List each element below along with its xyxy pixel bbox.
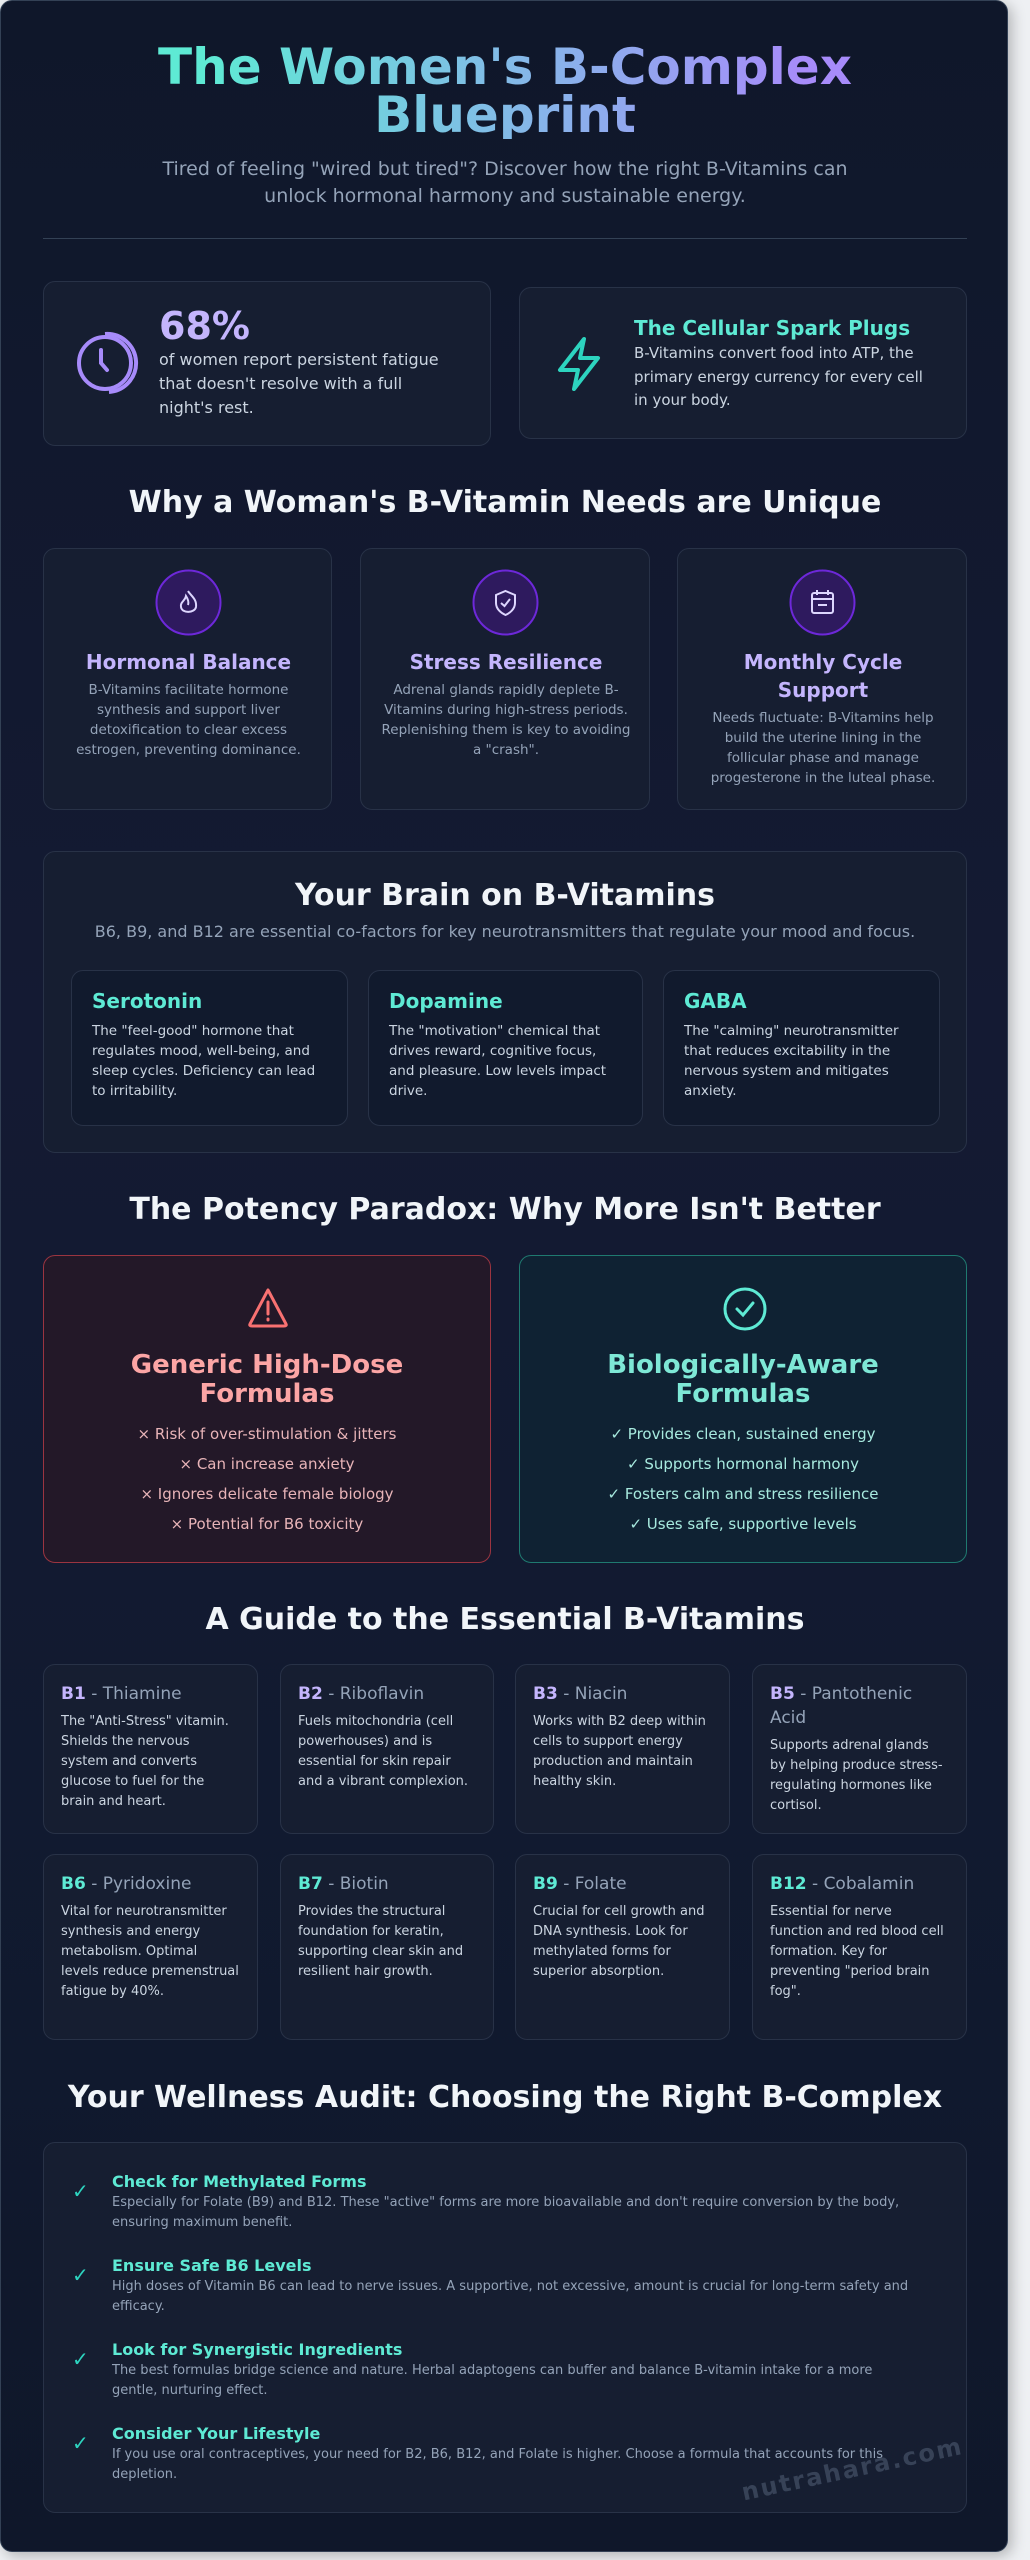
- card: dopamine: The "motivation" chemical that drives reward, cognitive focus, and pleasure. Low levels impact drive.: [389, 1023, 606, 1099]
- item 3: [72, 2340, 872, 2398]
- icon: flame: [156, 570, 222, 636]
- vitamin card B6: [43, 1854, 258, 2040]
- stat text: of women report persistent fatigue that doesn't resolve with a full night's rest.: [159, 350, 439, 417]
- title: [1, 43, 1009, 139]
- text: [711, 650, 935, 786]
- heading: wellness audit: Your Wellness Audit: Choosing the Right B-Complex: [68, 2080, 942, 2115]
- panel: biologically-aware: [519, 1255, 967, 1563]
- panel: generic formulas: [43, 1255, 491, 1563]
- card: serotonin: The "feel-good" hormone that regulates mood, well-being, and sleep cycles. Deficiency can lead to irritability.: [92, 1023, 315, 1099]
- vitamin card B3: Works with B2 deep within cells to support energy production and maintain healthy skin.: [533, 1714, 706, 1789]
- vitamin card B12: Essential for nerve function and red blood cell formation. Key for preventing "period brain fog".: [770, 1904, 944, 1999]
- text: The Cellular Spark Plugs: [634, 316, 910, 340]
- text: Formulas: [200, 1379, 334, 1409]
- text: Support: [778, 678, 868, 702]
- vitamin card B3: B3 - Niacin: [533, 1684, 627, 1704]
- item 4: ✓: [72, 2431, 89, 2455]
- item 3: The best formulas bridge science and nature. Herbal adaptogens can buffer and balance B-vitamin intake for a more gentle, nurturing effect.: [112, 2363, 872, 2398]
- icon: shield: [472, 570, 538, 636]
- panel: monthly cycle: [677, 548, 967, 810]
- item 2: Ensure Safe B6 Levels: [112, 2256, 311, 2275]
- vitamin card B1: [43, 1664, 258, 1834]
- item 1: Check for Methylated Forms: [112, 2172, 366, 2191]
- card: serotonin: Serotonin: [92, 989, 202, 1013]
- item 1: ✓: [72, 2179, 89, 2203]
- text: × Potential for B6 toxicity: [171, 1515, 363, 1533]
- vitamin card B2: [280, 1664, 494, 1834]
- text: × Can increase anxiety: [180, 1455, 354, 1473]
- text: Formulas: [676, 1379, 810, 1409]
- vitamin card B12: B12 - Cobalamin: [770, 1874, 914, 1894]
- card: dopamine: Dopamine: [389, 989, 503, 1013]
- vitamin card B9: Crucial for cell growth and DNA synthesis. Look for methylated forms for superior absorption.: [533, 1904, 704, 1979]
- vitamin card B1: B1 - Thiamine: [61, 1684, 182, 1704]
- stat text: 68%: [159, 304, 250, 348]
- text: Monthly Cycle: [744, 650, 902, 674]
- vitamin card B7: Provides the structural foundation for keratin, supporting clear skin and resilient hair growth.: [298, 1904, 463, 1979]
- item 3: ✓: [72, 2347, 89, 2371]
- text: × Ignores delicate female biology: [140, 1485, 394, 1503]
- vitamin card B5: [752, 1664, 967, 1834]
- stat text: [159, 304, 439, 417]
- text: ✓ Uses safe, supportive levels: [629, 1515, 857, 1533]
- card: dopamine: [368, 970, 643, 1126]
- text: × Risk of over-stimulation & jitters: [138, 1425, 396, 1443]
- icon: warning: [248, 1288, 288, 1328]
- item 4: If you use oral contraceptives, your need for B2, B6, B12, and Folate is higher. Choose a formula that accounts for this depletion.: [112, 2447, 883, 2482]
- vitamin card B5: B5 - Pantothenic Acid: [770, 1684, 912, 1728]
- text: ✓ Provides clean, sustained energy: [610, 1425, 876, 1443]
- item 4: [72, 2424, 883, 2482]
- icon: lightning: [558, 337, 600, 391]
- title: The Women's B-Complex: [158, 38, 852, 96]
- subtitle: Tired of feeling "wired but tired"? Discover how the right B-Vitamins can unlock hormonal harmony and sustainable energy.: [162, 158, 848, 207]
- text: Biologically-Aware: [607, 1350, 879, 1380]
- item 2: [72, 2256, 908, 2314]
- panel: brain: [43, 851, 967, 1153]
- icon: calendar: [790, 570, 856, 636]
- vitamin card B3: [515, 1664, 730, 1834]
- card: serotonin: [71, 970, 348, 1126]
- text: B-Vitamins convert food into ATP, the primary energy currency for every cell in your body.: [634, 344, 923, 409]
- subtext: B6, B9, and B12 are essential co-factors for key neurotransmitters that regulate your mood and focus.: [95, 922, 915, 941]
- vitamin card B2: Fuels mitochondria (cell powerhouses) and is essential for skin repair and a vibrant complexion.: [298, 1714, 468, 1789]
- text: Generic High-Dose: [131, 1350, 403, 1380]
- vitamin card B12: [752, 1854, 967, 2040]
- vitamin card B9: B9 - Folate: [533, 1874, 627, 1894]
- vitamin card B2: B2 - Riboflavin: [298, 1684, 424, 1704]
- item 2: High doses of Vitamin B6 can lead to nerve issues. A supportive, not excessive, amount is crucial for long-term safety and efficacy.: [112, 2279, 908, 2314]
- watermark: nutrahara.com: [739, 2432, 966, 2506]
- title: Blueprint: [374, 86, 636, 144]
- text: [634, 316, 923, 409]
- text: Needs fluctuate: B-Vitamins help build the uterine lining in the follicular phase and manage progesterone in the luteal phase.: [711, 710, 935, 786]
- text: [131, 1350, 403, 1533]
- vitamin card B5: Supports adrenal glands by helping produce stress-regulating hormones like cortisol.: [770, 1738, 943, 1813]
- item 1: Especially for Folate (B9) and B12. These "active" forms are more bioavailable and don't require conversion by the body, ensuring maximum benefit.: [112, 2195, 899, 2230]
- text: Stress Resilience: [410, 650, 602, 674]
- text: ✓ Fosters calm and stress resilience: [607, 1485, 878, 1503]
- item 3: Look for Synergistic Ingredients: [112, 2340, 402, 2359]
- text: [607, 1350, 879, 1533]
- vitamin card B6: Vital for neurotransmitter synthesis and energy metabolism. Optimal levels reduce premenstrual fatigue by 40%.: [61, 1904, 239, 1999]
- vitamin card B7: [280, 1854, 494, 2040]
- vitamin card B1: The "Anti-Stress" vitamin. Shields the nervous system and converts glucose to fuel for the brain and heart.: [61, 1714, 229, 1809]
- card: cellular spark plugs: [519, 287, 967, 439]
- card: GABA: The "calming" neurotransmitter that reduces excitability in the nervous system and mitigates anxiety.: [684, 1023, 899, 1099]
- vitamin card B7: B7 - Biotin: [298, 1874, 389, 1894]
- card: GABA: GABA: [684, 989, 747, 1013]
- text: Adrenal glands rapidly deplete B-Vitamins during high-stress periods. Replenishing them is key to avoiding a "crash".: [382, 682, 630, 758]
- icon: clock: [77, 332, 138, 394]
- item 2: ✓: [72, 2263, 89, 2287]
- heading: potency paradox: The Potency Paradox: Why More Isn't Better: [129, 1192, 881, 1227]
- panel: audit checklist: [43, 2142, 967, 2513]
- panel: hormonal balance: [43, 548, 332, 810]
- heading: guide: A Guide to the Essential B-Vitamins: [205, 1602, 805, 1637]
- panel: stress resilience: [360, 548, 650, 810]
- heading: Your Brain on B-Vitamins: [295, 878, 715, 913]
- item 4: Consider Your Lifestyle: [112, 2424, 320, 2443]
- item 1: [72, 2172, 899, 2230]
- vitamin card B9: [515, 1854, 730, 2040]
- text: B-Vitamins facilitate hormone synthesis and support liver detoxification to clear excess estrogen, preventing dominance.: [76, 682, 301, 758]
- text: ✓ Supports hormonal harmony: [627, 1455, 859, 1473]
- text: Hormonal Balance: [86, 650, 291, 674]
- stat card: 68%: [43, 281, 491, 446]
- card: GABA: [663, 970, 940, 1126]
- vitamin card B6: B6 - Pyridoxine: [61, 1874, 191, 1894]
- icon: check circle: [724, 1288, 766, 1330]
- heading: unique needs: Why a Woman's B-Vitamin Needs are Unique: [129, 485, 881, 520]
